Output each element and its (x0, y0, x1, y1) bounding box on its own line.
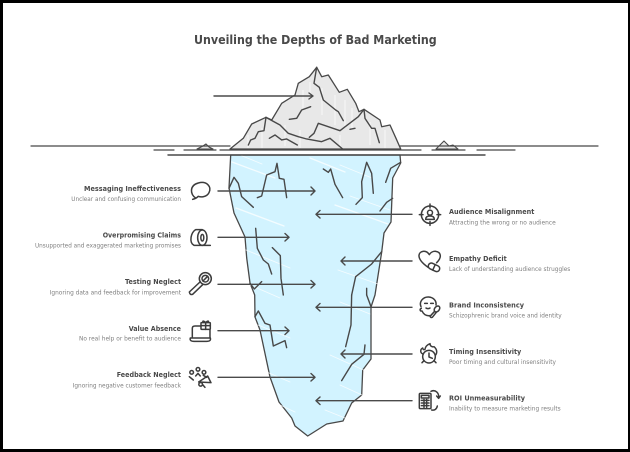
item: Testing Neglect: Testing Neglect (125, 277, 181, 286)
iceberg tip above water (230, 67, 401, 149)
icon: people and megaphone (189, 367, 211, 387)
item: Empathy Deficit: Empathy Deficit (449, 254, 507, 263)
icon: gift on laptop (190, 321, 210, 341)
item: Testing Neglect: Ignoring data and feedback for improvement (50, 289, 182, 296)
item: Overpromising Claims (35, 230, 210, 250)
item: Value Absence (79, 321, 210, 343)
item: Value Absence: No real help or benefit to audience (79, 336, 181, 343)
arrow: value absence (218, 327, 289, 334)
icon: magnifier (189, 273, 211, 295)
item: Feedback Neglect: Ignoring negative customer feedback (73, 382, 182, 389)
icon: target person (419, 204, 441, 225)
item: Timing Insensitivity: Poor timing and cultural insensitivity (449, 359, 556, 366)
item: Audience Misalignment: Audience Misalignment (449, 207, 535, 216)
icon: face and microphone (420, 297, 441, 318)
item: ROI Unmeasurability (419, 391, 561, 413)
item: ROI Unmeasurability: Inability to measure marketing results (449, 406, 561, 413)
arrow: brand inconsistency (316, 304, 412, 311)
arrow: roi unmeasurability (316, 397, 412, 404)
title: Unveiling the Depths of Bad Marketing (194, 33, 437, 47)
item: Overpromising Claims: Overpromising Claims (103, 230, 182, 240)
icon: calculator and arrows (419, 391, 440, 410)
item: Messaging Ineffectiveness (71, 182, 210, 203)
item: Value Absence: Value Absence (129, 324, 181, 333)
item: Empathy Deficit: Lack of understanding audience struggles (449, 266, 570, 273)
item: Timing Insensitivity (421, 344, 556, 366)
item: Testing Neglect (50, 273, 211, 296)
small iceberg right (436, 141, 458, 149)
item: Audience Misalignment (419, 204, 556, 226)
item: Brand Inconsistency: Schizophrenic brand voice and identity (449, 313, 562, 320)
arrow: messaging ineffectiveness (218, 187, 315, 195)
item: Feedback Neglect: Feedback Neglect (117, 370, 181, 379)
iceberg body under water (229, 155, 401, 436)
item: Overpromising Claims: Unsupported and exaggerated marketing promises (35, 243, 181, 250)
arrow: timing insensitivity (341, 350, 412, 358)
icon: heart and pill (419, 251, 441, 273)
small iceberg left (197, 144, 213, 149)
arrow: overpromising claims (218, 234, 289, 241)
icon: roll of tape (191, 230, 210, 245)
item: Brand Inconsistency: Brand Inconsistency (449, 300, 524, 309)
icon: speech bubble (191, 182, 210, 199)
item: Feedback Neglect (73, 367, 211, 389)
arrow: audience misalignment (316, 210, 412, 218)
item: Timing Insensitivity: Timing Insensitivity (449, 347, 521, 356)
item: Messaging Ineffectiveness: Messaging Ineffectiveness (84, 184, 182, 193)
item: ROI Unmeasurability: ROI Unmeasurability (449, 393, 525, 402)
arrow: tip (214, 93, 313, 99)
arrow: empathy deficit (341, 257, 412, 265)
item: Messaging Ineffectiveness: Unclear and confusing communication (71, 196, 181, 203)
item: Brand Inconsistency (420, 297, 562, 320)
arrow: feedback neglect (218, 374, 315, 381)
item: Audience Misalignment: Attracting the wrong or no audience (449, 219, 556, 226)
arrow: testing neglect (218, 280, 315, 288)
water lines (31, 146, 598, 155)
icon: clock in flame (421, 344, 437, 363)
item: Empathy Deficit (419, 251, 570, 273)
